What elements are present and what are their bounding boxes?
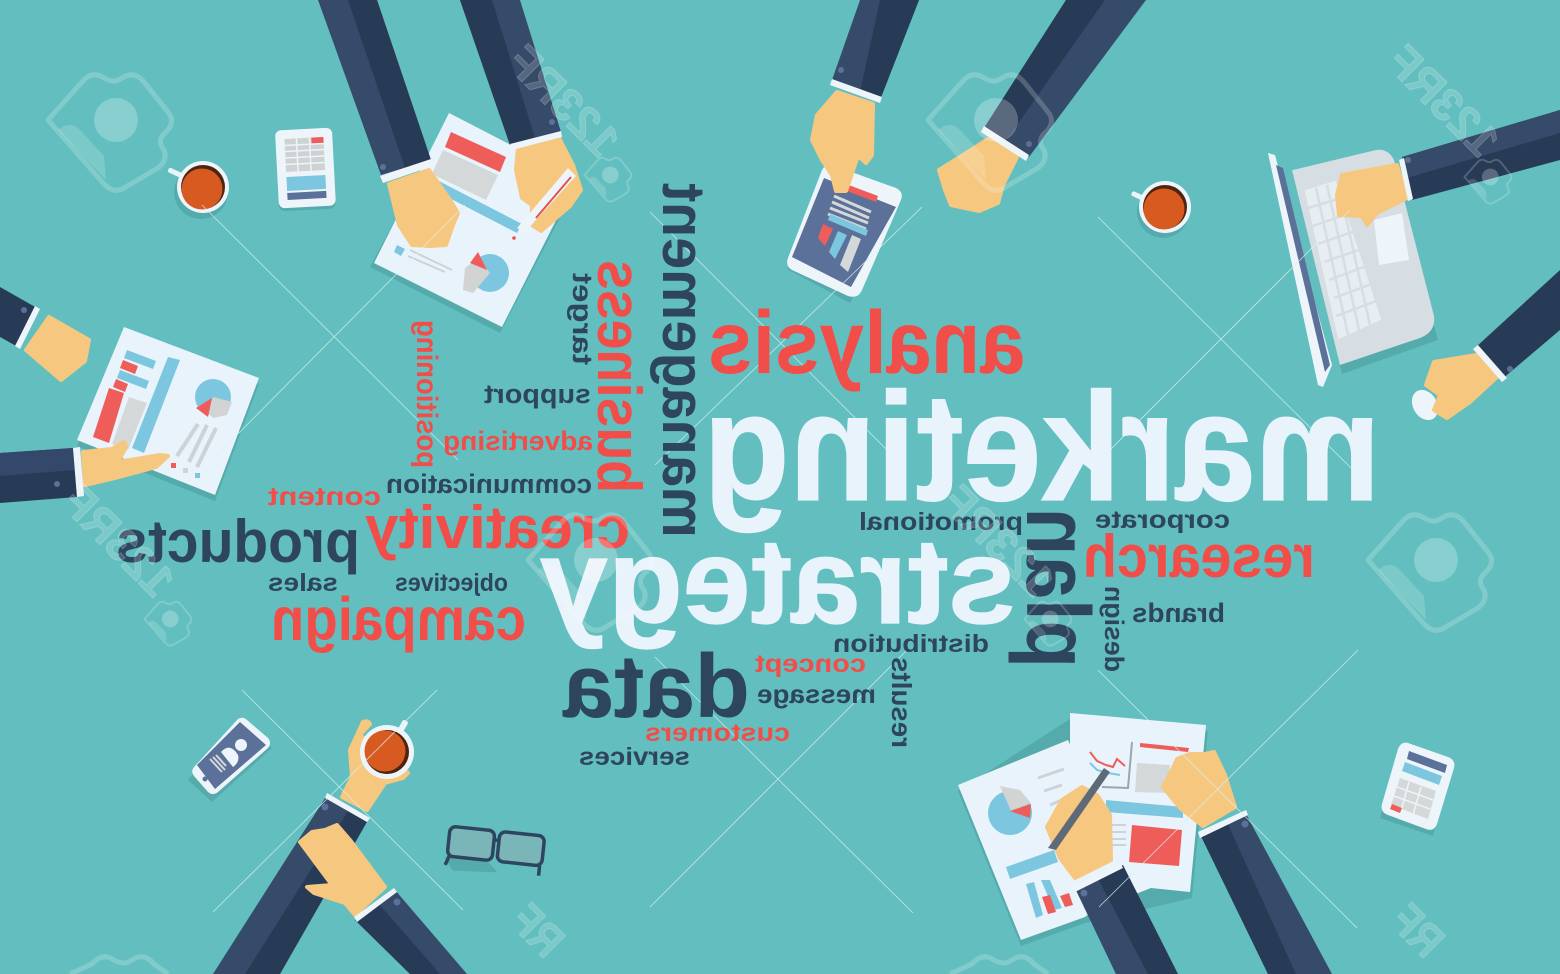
word: management: management <box>650 183 717 538</box>
word: promotional: promotional <box>859 508 1023 536</box>
watermark pattern: RF <box>1381 894 1455 967</box>
icon: glasses <box>443 826 545 880</box>
word: concept: concept <box>754 650 866 678</box>
lower left arm <box>0 448 77 503</box>
word: objectives: objectives <box>395 569 508 597</box>
pen <box>517 168 576 232</box>
keyboard <box>1304 180 1382 340</box>
chart frame <box>1102 742 1132 788</box>
icon: coffee cup top centre <box>1131 181 1191 238</box>
icon: calculator bottom right <box>1380 743 1454 836</box>
illustration: left hands with report sheet <box>0 287 259 503</box>
trackpad <box>1374 213 1409 265</box>
word: advertising: advertising <box>443 426 593 456</box>
illustration: arm and open hand top centre <box>939 0 1146 211</box>
word: communication: communication <box>386 469 592 499</box>
upper left arm <box>0 287 37 347</box>
word: content: content <box>268 481 381 511</box>
word: message: message <box>757 679 876 709</box>
word: support: support <box>484 379 591 409</box>
word: customers: customers <box>645 719 790 747</box>
hand holding cup <box>342 721 408 810</box>
word: services: services <box>579 743 690 771</box>
report sheet <box>77 327 259 495</box>
watermark pattern: 123RF <box>52 475 185 607</box>
word: distribution: distribution <box>833 630 989 658</box>
diagonal watermark lines <box>202 205 1358 928</box>
word: results: results <box>886 657 917 748</box>
right arm <box>1199 812 1332 974</box>
arm <box>832 0 919 100</box>
tablet <box>787 165 902 297</box>
word: research: research <box>1083 523 1315 590</box>
watermark pattern: 123RF <box>497 35 630 167</box>
word: plan: plan <box>1007 508 1107 668</box>
right arm <box>460 0 561 145</box>
word: marketing: marketing <box>703 361 1381 533</box>
watermark pattern: 123RF <box>1377 35 1510 167</box>
word: campaign: campaign <box>271 585 526 653</box>
illustration: pointing hand with tablet <box>787 0 919 303</box>
word: target: target <box>567 273 598 365</box>
word: positioning: positioning <box>410 320 443 468</box>
word: analysis: analysis <box>708 292 1025 392</box>
word: design: design <box>1099 586 1129 672</box>
bar chart <box>1026 880 1073 918</box>
watermark pattern: RF <box>501 894 575 967</box>
icon: calculator tablet top left <box>275 128 336 211</box>
lower hand <box>300 825 385 915</box>
word: brands: brands <box>1132 598 1225 628</box>
word: business: business <box>584 260 653 493</box>
illustration: bottom-right hands with papers <box>958 713 1332 974</box>
coffee cup <box>397 719 409 733</box>
watermark pattern: 123RF <box>932 475 1065 607</box>
laptop body <box>1292 150 1434 365</box>
word: corporate: corporate <box>1095 506 1230 534</box>
icon: smartphone <box>188 718 272 802</box>
word cloud <box>116 183 1381 771</box>
illustration: laptop with hands <box>1268 110 1560 425</box>
back sheet <box>1070 713 1206 895</box>
icon: coffee cup top left <box>167 161 229 219</box>
front sheet <box>958 740 1130 940</box>
word: creativity: creativity <box>364 494 630 561</box>
illustration: arms with coffee cup bottom left <box>213 719 467 974</box>
left arm <box>1075 865 1178 974</box>
word: sales: sales <box>268 569 338 597</box>
word: products: products <box>116 508 360 575</box>
word: strategy: strategy <box>540 513 1016 649</box>
word: data: data <box>562 637 750 737</box>
left arm <box>318 0 431 175</box>
report sheet <box>374 113 577 327</box>
pen <box>1048 768 1110 850</box>
illustration: top-left hands with report sheet <box>318 0 581 333</box>
laptop lid <box>1268 153 1332 387</box>
upper arm <box>1402 110 1560 200</box>
lower arm <box>1476 270 1560 380</box>
